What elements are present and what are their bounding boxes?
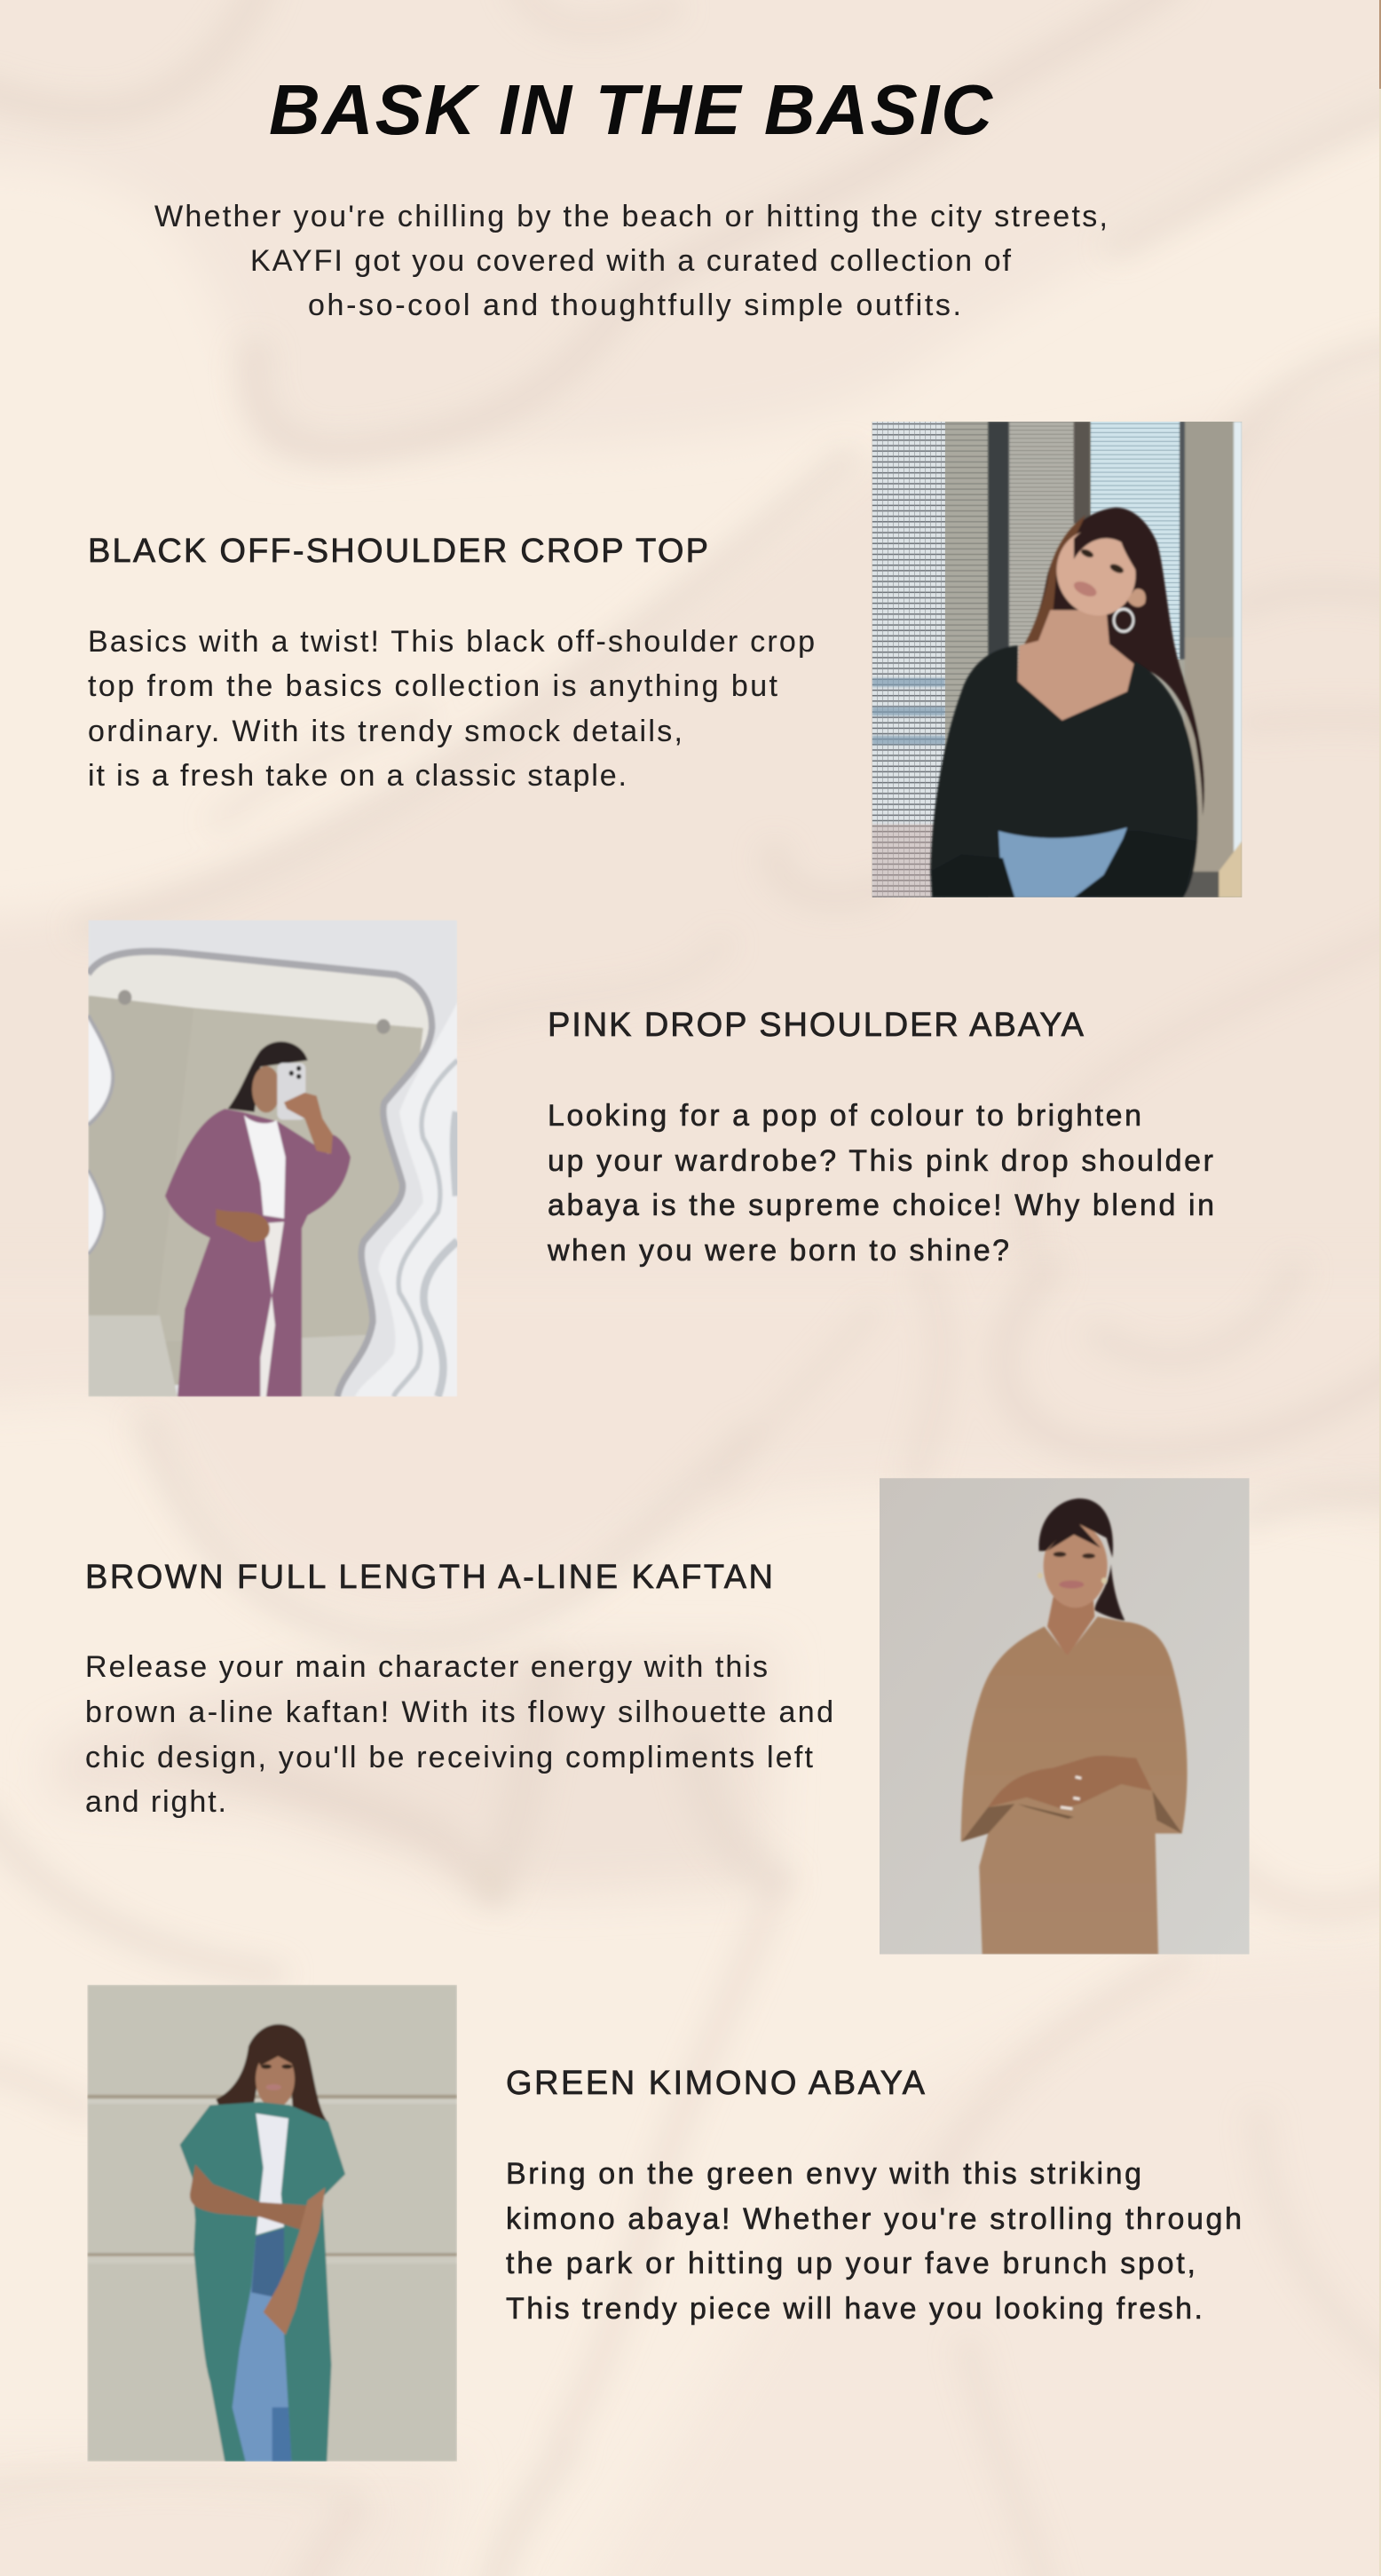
description: black crop top: ordinary. With its trendy smock details, — [88, 715, 683, 748]
description: brown kaftan — [85, 1650, 833, 1819]
panel: green kimono abaya — [87, 1985, 1242, 2461]
description: brown kaftan: and right. — [85, 1785, 226, 1819]
photo: woman in black crop top by window — [872, 422, 1242, 897]
description: black crop top: it is a fresh take on a classic staple. — [88, 759, 627, 793]
intro text block: KAYFI got you covered with a curated collection of — [250, 244, 1012, 278]
description: green kimono: the park or hitting up your fave brunch spot, — [506, 2247, 1196, 2280]
heading: brown kaftan: BROWN FULL LENGTH A-LINE KAFTAN — [85, 1559, 773, 1596]
intro text block: Whether you're chilling by the beach or hitting the city streets, — [154, 200, 1108, 233]
heading: green kimono: GREEN KIMONO ABAYA — [506, 2065, 926, 2102]
title: BASK IN THE BASIC — [269, 70, 993, 149]
description: pink abaya: when you were born to shine? — [547, 1234, 1009, 1268]
intro text block: oh-so-cool and thoughtfully simple outfits. — [308, 288, 961, 322]
heading: black crop top: BLACK OFF-SHOULDER CROP TOP — [88, 533, 708, 570]
description: pink abaya: Looking for a pop of colour to brighten — [548, 1099, 1141, 1133]
panel: black off-shoulder crop top — [88, 422, 1242, 897]
panel: pink drop shoulder abaya — [88, 920, 1214, 1396]
description: brown kaftan: chic design, you'll be receiving compliments left — [85, 1741, 814, 1774]
description: brown kaftan: Release your main character energy with this — [85, 1650, 768, 1684]
photo: woman in brown kaftan — [880, 1478, 1250, 1955]
description: green kimono: kimono abaya! Whether you're strolling through — [506, 2202, 1242, 2236]
description: black crop top — [88, 625, 815, 793]
description: black crop top: Basics with a twist! This black off-shoulder crop — [88, 625, 815, 659]
description: pink abaya — [547, 1099, 1214, 1268]
description: black crop top: top from the basics collection is anything but — [88, 669, 778, 703]
description: pink abaya: abaya is the supreme choice! Why blend in — [548, 1189, 1214, 1222]
description: brown kaftan: brown a-line kaftan! With its flowy silhouette and — [85, 1695, 833, 1729]
description: green kimono: Bring on the green envy with this striking — [506, 2157, 1141, 2191]
photo: woman in green kimono abaya — [87, 1985, 457, 2461]
description: pink abaya: up your wardrobe? This pink drop shoulder — [548, 1144, 1213, 1178]
description: green kimono: This trendy piece will have you looking fresh. — [506, 2292, 1203, 2326]
intro text block — [154, 200, 1108, 322]
panel: brown full length a-line kaftan — [85, 1478, 1250, 1955]
heading: pink abaya: PINK DROP SHOULDER ABAYA — [548, 1007, 1085, 1044]
photo: mirror selfie in pink abaya — [88, 920, 458, 1396]
description: green kimono — [506, 2157, 1242, 2326]
